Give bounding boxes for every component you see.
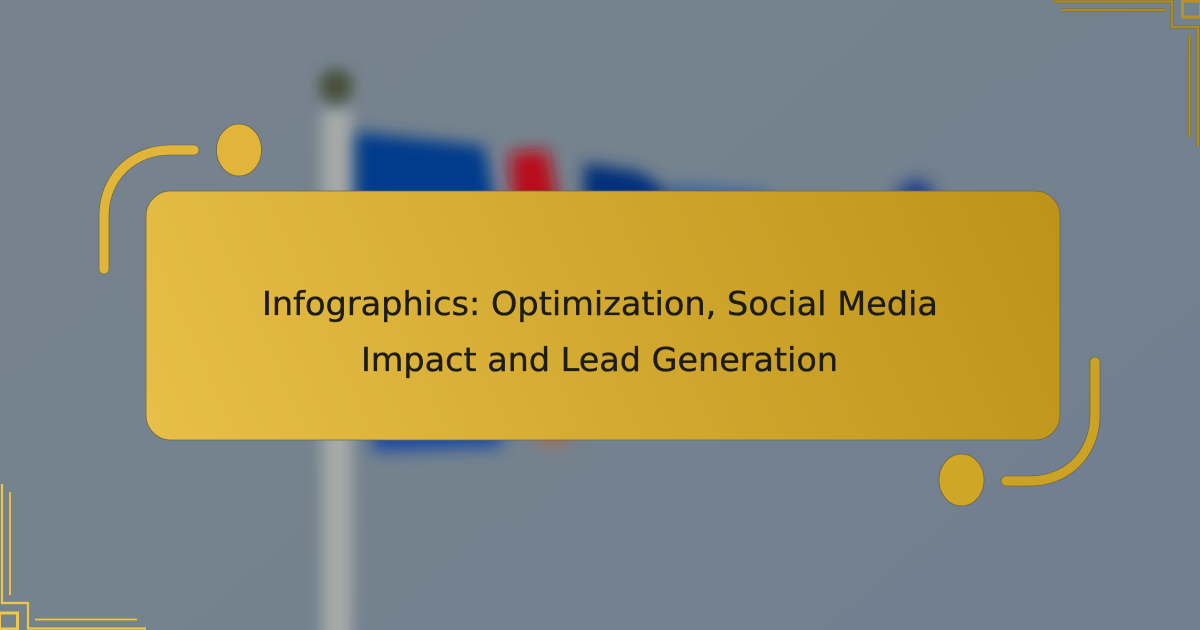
decorative circle bottom right	[939, 454, 984, 506]
title line 2: Impact and Lead Generation	[361, 340, 838, 379]
corner ornament top right	[1054, 1, 1200, 146]
title line 1: Infographics: Optimization, Social Media	[262, 284, 938, 323]
pole finial	[319, 69, 353, 103]
flag pole	[322, 110, 352, 630]
decorative circle top left	[216, 124, 262, 176]
decorative arc top left	[104, 150, 194, 269]
title panel	[146, 191, 1060, 440]
decorative arc bottom right	[1006, 362, 1095, 481]
corner ornament bottom left	[0, 484, 146, 629]
title	[262, 284, 938, 379]
blurred flag	[356, 132, 938, 452]
